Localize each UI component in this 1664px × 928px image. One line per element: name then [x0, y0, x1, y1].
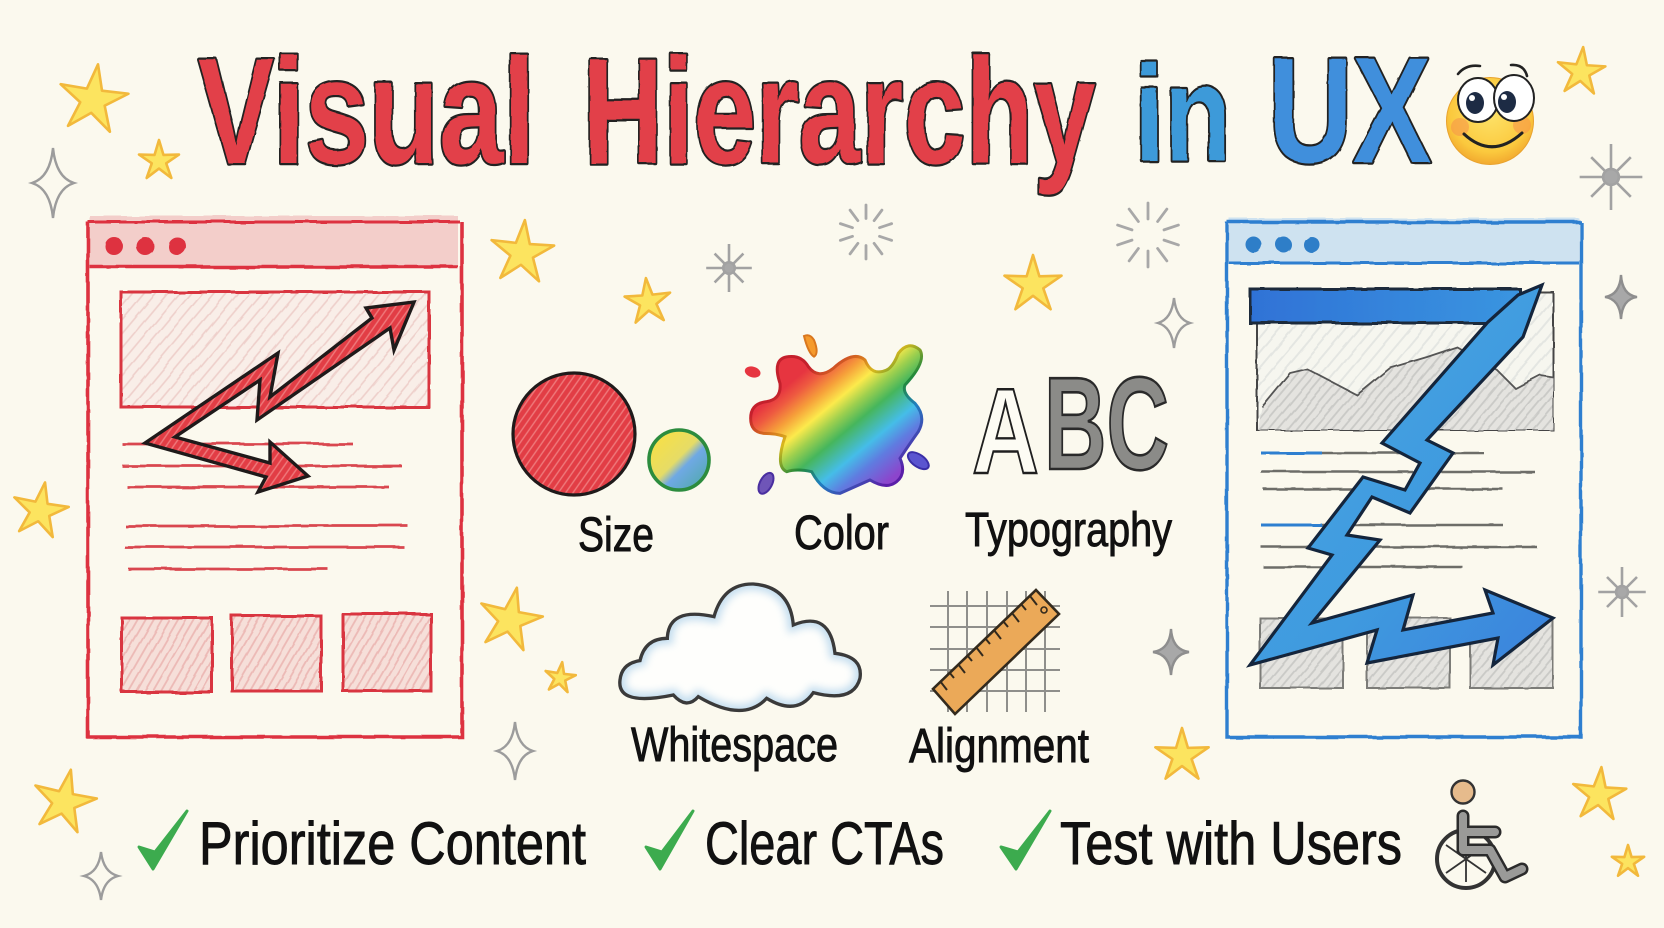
- icon: yellow star: [139, 140, 179, 178]
- text: Prioritize Content: [199, 810, 586, 877]
- icon: dashed burst: [1118, 203, 1178, 267]
- icon: yellow star: [623, 276, 672, 323]
- icon: green check: [139, 811, 187, 869]
- label: Typography: Typography: [965, 504, 1172, 557]
- icon: asterisk spark: [1598, 567, 1646, 617]
- icon: yellow star: [9, 478, 72, 539]
- card blocks: [1260, 618, 1553, 688]
- arrow: red Z reading path: [145, 302, 414, 492]
- icon: ABC letters: A: [972, 363, 1039, 499]
- icon: yellow star: [474, 581, 548, 653]
- icon: filled sparkle: [1605, 275, 1637, 319]
- icon: outline sparkle: [84, 852, 118, 900]
- icon: outline sparkle: [1158, 298, 1190, 348]
- title: Visual Hierarchy in UX: [198, 26, 1431, 195]
- panel: red wireframe window: [88, 216, 462, 737]
- icon: yellow star: [28, 763, 102, 835]
- icon: asterisk spark: [1580, 144, 1642, 210]
- title bar with dots: [88, 216, 460, 267]
- icon: rainbow paint splat: [744, 335, 932, 496]
- title bar with dots: [1227, 218, 1581, 263]
- title: Visual Hierarchy in UX: Hierarchy: [583, 27, 1095, 195]
- icon: green check: [646, 811, 693, 869]
- panel: blue wireframe window: [1227, 218, 1581, 737]
- icon: grid and ruler: [930, 590, 1060, 714]
- icon: wheelchair user: [1437, 780, 1522, 888]
- icon: yellow star: [1004, 255, 1062, 309]
- checklist: Prioritize Content: [139, 810, 586, 877]
- icon: yellow star: [1556, 45, 1607, 94]
- arrow: blue Z reading path: [1250, 285, 1553, 665]
- label: Whitespace: Whitespace: [631, 719, 838, 772]
- text lines: [122, 444, 408, 569]
- card blocks: [122, 614, 431, 692]
- checklist: Clear CTAs: [646, 810, 944, 877]
- window frame: [1227, 222, 1581, 737]
- icon: cloud: [620, 584, 860, 710]
- title: Visual Hierarchy in UX: in: [1134, 38, 1231, 189]
- blue header bar: [1250, 289, 1520, 323]
- icon: dashed burst: [840, 205, 892, 259]
- icon: yellow star: [543, 660, 577, 693]
- icon: yellow star: [1155, 728, 1209, 779]
- label: Alignment: Alignment: [909, 720, 1089, 773]
- hero block: [121, 292, 429, 407]
- icon: asterisk spark: [706, 244, 752, 292]
- icon: smiley face: [1446, 65, 1534, 164]
- label: Color: Color: [794, 507, 889, 560]
- icon: ABC letters: BC: [1044, 350, 1169, 497]
- text lines: [1261, 453, 1537, 567]
- icon: ABC letters: [972, 350, 1169, 499]
- label: Size: Size: [578, 509, 654, 562]
- checklist: Test with Users: [1001, 810, 1402, 877]
- window frame: [88, 222, 462, 737]
- icon: size circles: [513, 373, 709, 495]
- icon: outline sparkle: [32, 148, 74, 218]
- icon: yellow star: [55, 60, 132, 134]
- icon: yellow star: [488, 217, 556, 282]
- icon: outline sparkle: [497, 722, 533, 780]
- text: Test with Users: [1060, 810, 1402, 877]
- title: Visual Hierarchy in UX: Visual: [198, 27, 535, 195]
- icon: filled sparkle: [1153, 629, 1189, 675]
- text: Clear CTAs: [705, 810, 944, 877]
- icon: yellow star: [1570, 765, 1628, 820]
- icon: yellow star: [1612, 845, 1644, 876]
- image placeholder with mountains: [1257, 292, 1553, 430]
- icon: green check: [1001, 811, 1050, 869]
- title: Visual Hierarchy in UX: UX: [1268, 26, 1431, 194]
